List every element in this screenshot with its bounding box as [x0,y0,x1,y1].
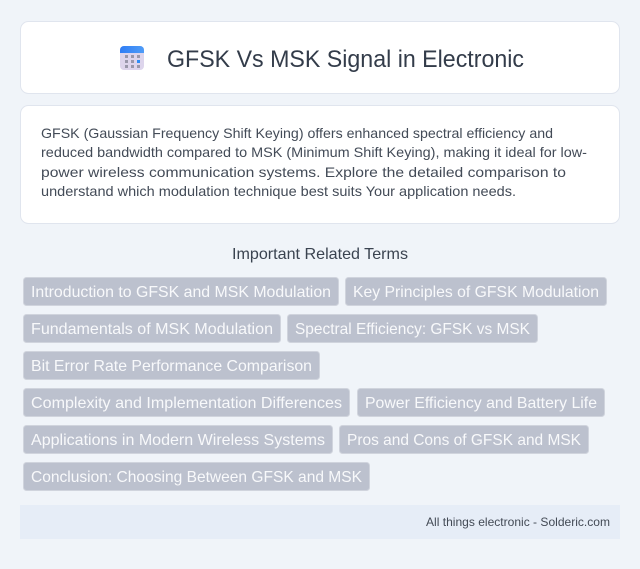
panel: intro paragraph: GFSK (Gaussian Frequency Shift Keying) offers enhanced spectral efficiency and [41,125,553,141]
tag [24,426,332,454]
icon: calendar [120,46,144,70]
tag [346,278,606,306]
tag [24,388,350,416]
tag [24,314,280,342]
tag [288,314,538,342]
tag: Conclusion: Choosing Between GFSK and MSK [31,469,362,486]
tag: Power Efficiency and Battery Life [365,395,597,412]
tag list [24,278,606,490]
title: GFSK Vs MSK Signal in Electronic [167,46,524,73]
tag [24,278,338,306]
tag: Bit Error Rate Performance Comparison [31,358,312,375]
footer [20,505,620,539]
tag: Introduction to GFSK and MSK Modulation [31,284,331,301]
tag [358,388,604,416]
tag: Complexity and Implementation Differences [31,395,342,412]
heading: related terms: Important Related Terms [232,246,408,263]
panel: intro paragraph: power wireless communication systems. Explore the detailed comparison to [41,164,566,180]
panel: intro paragraph [20,106,620,224]
tag: Spectral Efficiency: GFSK vs MSK [295,321,530,338]
footer: All things electronic - Solderic.com [426,515,610,529]
tag [24,462,370,490]
panel: header [20,22,620,94]
tag [340,426,588,454]
tag [24,352,320,380]
tag: Applications in Modern Wireless Systems [31,432,325,449]
panel: intro paragraph: reduced bandwidth compared to MSK (Minimum Shift Keying), making it ideal for low- [41,144,587,160]
tag: Pros and Cons of GFSK and MSK [347,432,581,449]
tag: Key Principles of GFSK Modulation [353,284,599,301]
tag: Fundamentals of MSK Modulation [31,321,273,338]
panel: intro paragraph: understand which modulation technique best suits Your application needs. [41,183,516,199]
